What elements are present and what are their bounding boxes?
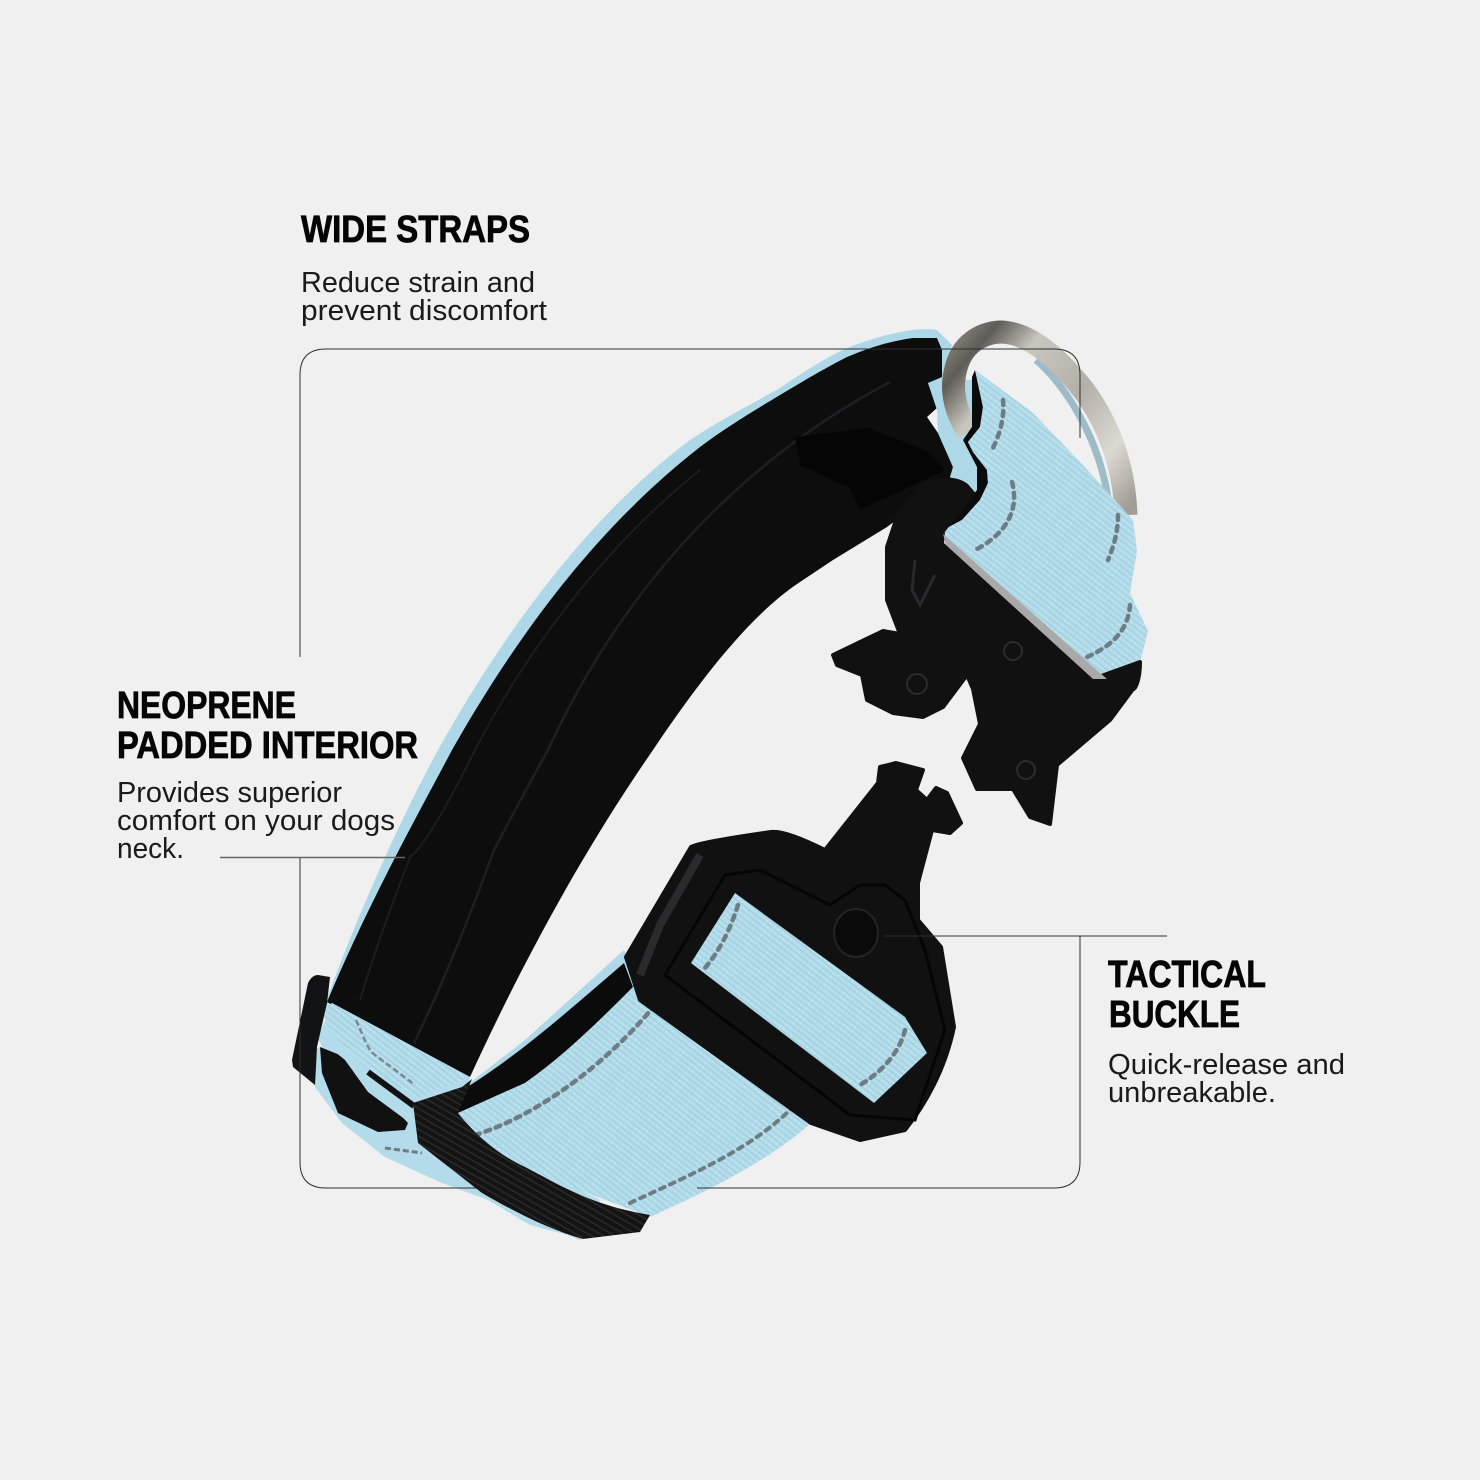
label: wide straps: Reduce strain and <box>301 267 535 299</box>
slide bar <box>292 975 330 1085</box>
label: wide straps: prevent discomfort <box>301 295 547 327</box>
frayed strap end <box>928 378 992 492</box>
strap black edge <box>947 370 988 528</box>
strap face <box>943 370 1148 679</box>
label: tactical buckle: TACTICAL <box>1108 954 1266 996</box>
strap black binding <box>458 963 633 1113</box>
label: tactical buckle <box>1108 954 1345 1109</box>
label: neoprene padded interior: neck. <box>117 833 184 865</box>
buckle bevel <box>640 855 700 975</box>
velcro patch <box>795 428 945 510</box>
label: wide straps <box>301 209 547 327</box>
collar illustration <box>292 329 1148 1240</box>
upper strap <box>943 370 1148 679</box>
strap stitching <box>992 400 1003 450</box>
label: neoprene padded interior: comfort on your dogs <box>117 805 395 837</box>
lower strap fold <box>313 1003 650 1240</box>
grey shim <box>943 534 1107 679</box>
buckle pins <box>907 642 1035 779</box>
label: neoprene padded interior: Provides superior <box>117 777 342 809</box>
strap blue top edge <box>467 950 640 1112</box>
label: tactical buckle: Quick-release and <box>1108 1049 1345 1081</box>
label: neoprene padded interior: NEOPRENE <box>117 685 296 727</box>
wide strap <box>413 950 811 1239</box>
fold blue base <box>318 1003 470 1127</box>
release button <box>834 909 878 957</box>
padded seam lines <box>414 382 890 1043</box>
label: tactical buckle: BUCKLE <box>1109 994 1240 1036</box>
buckle webbing <box>691 893 927 1103</box>
upper buckle <box>833 480 1140 824</box>
D-ring <box>953 332 1126 515</box>
inner black lining <box>320 1047 408 1132</box>
black keeper and binding <box>413 1079 650 1239</box>
label: neoprene padded interior: PADDED INTERIOR <box>117 725 418 767</box>
padded band outer blue edge <box>322 329 952 1010</box>
label: wide straps: WIDE STRAPS <box>301 209 530 251</box>
second fold <box>318 1027 413 1123</box>
label: neoprene padded interior <box>117 685 418 865</box>
lower buckle: body <box>626 763 961 1140</box>
fold stitching <box>356 1020 415 1085</box>
outer blue loop <box>313 1047 650 1240</box>
label: tactical buckle: unbreakable. <box>1108 1077 1276 1109</box>
strap blue face <box>458 987 811 1217</box>
upper fold <box>322 1003 470 1098</box>
callout frame lines <box>220 349 1167 1188</box>
neoprene padded interior <box>327 338 953 1077</box>
stitching <box>475 1005 655 1135</box>
slot <box>368 1072 414 1106</box>
